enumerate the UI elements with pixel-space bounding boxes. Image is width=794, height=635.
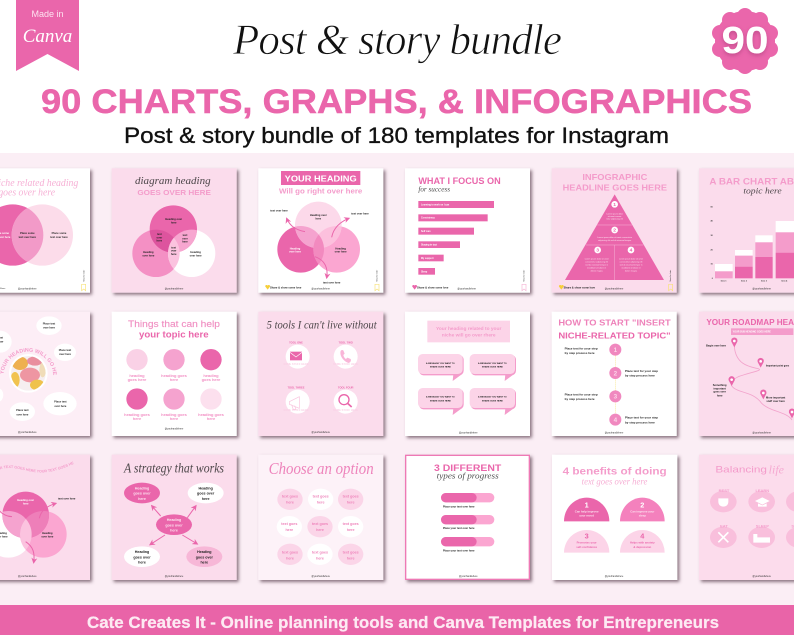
panel: speech bubbles template: A MESSAGE YOU WANT TO (426, 396, 455, 399)
panel: horizontal bars template: @yourhandlehere (457, 288, 477, 291)
panel: pyramid infographic template: dolore magna (625, 269, 638, 272)
panel: three circle diagram template: text (171, 245, 176, 249)
panel: venn with arrows template: @yourhandlehere (311, 288, 331, 291)
panel: macaron photo bubbles template: over here (43, 326, 55, 330)
panel: five tools template: SOME STUFF HERE (283, 362, 309, 366)
panel: circles grid template: heading (203, 373, 219, 378)
panel: pyramid infographic template: 3 (596, 248, 599, 254)
panel: pyramid infographic template: Lorem ipsum dolor (606, 212, 623, 215)
panel: choose an option template: text goes (343, 522, 359, 526)
panel: two circle venn template (0, 168, 90, 293)
panel: choose an option template: text goes (313, 494, 329, 498)
panel: how to start steps template: @yourhandlehere (605, 431, 624, 434)
panel: venn with arrows template: Heading (335, 246, 346, 250)
panel: strategy map template: Heading (135, 486, 149, 490)
panel: choose an option template (258, 455, 383, 580)
footer bar: Cate Creates It - Online planning tools and Canva Templates for Entrepreneurs (87, 613, 719, 632)
panel: stacked bar chart template: Item 3 (761, 280, 768, 283)
panel: horizontal bars template: Consistency (421, 217, 436, 220)
panel: speech bubbles template: SHARE GOES HERE (430, 366, 451, 369)
panel: choose an option template: here (347, 528, 355, 532)
panel: three circle diagram template: text (157, 232, 162, 236)
panel: pyramid infographic template: consectetur adipiscing elit (585, 260, 608, 263)
panel: stacked bar chart template: 0 (712, 278, 714, 280)
panel: strategy map template: Heading (198, 486, 213, 490)
panel: speech bubbles template: SHARE GOES HERE (482, 399, 503, 402)
panel: two circle venn template: Save for later (82, 270, 85, 282)
panel: stacked bar chart template: topic here (743, 186, 782, 195)
panel: macaron photo bubbles template (0, 312, 94, 440)
panel: speech bubbles template (405, 312, 530, 436)
panel: circles grid template: heading (129, 373, 145, 378)
panel: stacked bar chart template: 20 (711, 249, 714, 251)
panel: horizontal bars template: Self care (421, 231, 431, 233)
panel: roadmap template: More important (766, 395, 785, 399)
badge: 90 (712, 8, 778, 74)
panel: circles grid template (112, 312, 237, 436)
panel: choose an option template: here (316, 528, 324, 532)
panel: pyramid infographic template (552, 168, 677, 293)
panel: stacked bar chart template: Item 2 (741, 280, 748, 283)
panel: strategy map template: goes over (197, 492, 215, 496)
panel: five tools template: TOOL ONE (289, 341, 303, 345)
panel: strategy map template: here (138, 497, 146, 501)
panel: roadmap template: stuff over here (766, 399, 785, 403)
panel: two circle venn template: Share (0, 287, 6, 290)
panel: strategy map template (112, 455, 237, 580)
panel: two circle venn template: Place some (20, 231, 35, 235)
panel: pyramid infographic template: INFOGRAPHIC (582, 172, 648, 182)
panel: stacked bar chart template: 30 (711, 235, 714, 237)
panel: macaron photo bubbles template: Place text (54, 400, 67, 404)
panel: macaron photo bubbles template: over here (54, 404, 67, 408)
panel: four benefits template: 3 (585, 532, 589, 541)
panel: strategy map template: A strategy that works (123, 461, 224, 476)
main title: 90 CHARTS, GRAPHS, & INFOGRAPHICS (41, 83, 752, 121)
badge: Made in Canva ribbon: Made in (31, 9, 64, 19)
panel: circles grid template: here (133, 416, 142, 421)
panel: macaron photo bubbles template: @yourhandlehere (18, 431, 37, 434)
panel: horizontal bars template: for success (418, 184, 450, 193)
panel: venn with arrows template: Share & show some love (270, 285, 302, 289)
panel: stacked bar chart template: 40 (711, 220, 714, 223)
panel: strategy map template: goes over (196, 555, 214, 559)
panel: five tools template: 5 tools I can't live without (267, 317, 377, 331)
panel: how to start steps template: 2 (614, 370, 618, 377)
panel: horizontal bars template: Share & show some love (417, 285, 449, 289)
panel: wavy text venn template: over here (41, 535, 54, 539)
page background (0, 153, 794, 605)
panel: four benefits template (552, 455, 677, 580)
panel: roadmap template: YOUR ROADMAP HEA (706, 318, 794, 327)
panel: roadmap template: Important point goes (766, 365, 790, 368)
panel: speech bubbles template: A MESSAGE YOU WANT TO (426, 362, 455, 365)
panel: progress bars template: @yourhandlehere (459, 575, 478, 578)
panel: pyramid infographic template: HEADLINE GOES HERE (563, 182, 667, 192)
panel: roadmap template: Begin over here (706, 344, 727, 348)
panel: pyramid infographic template: @yourhandlehere (605, 288, 624, 291)
panel: choose an option template: here (286, 556, 294, 560)
panel: circles grid template: @yourhandlehere (165, 428, 184, 431)
panel: roadmap template: important (714, 386, 726, 390)
panel: how to start steps template: by step process here (625, 420, 655, 424)
panel: how to start steps template: HOW TO START "INSERT (558, 318, 671, 328)
panel: circles grid template: here (207, 416, 216, 421)
panel: choose an option template: text goes (281, 522, 297, 526)
panel: roadmap template: here (717, 394, 723, 398)
panel: four benefits template: & depression (633, 545, 652, 549)
panel: pyramid infographic template: 1 (613, 202, 616, 208)
panel: pyramid infographic template: Save for later (669, 270, 672, 282)
panel: speech bubbles template: SHARE GOES HERE (430, 399, 451, 402)
panel: wavy text venn template: here (23, 502, 29, 506)
panel: horizontal bars template: Staying in tact (421, 244, 437, 247)
panel: roadmap template: goes over (713, 390, 726, 394)
panel: pyramid infographic template: tetur adipiscing elit (606, 218, 623, 221)
panel: circles grid template: Things that can help (128, 319, 220, 329)
panel: three circle diagram template: over (157, 235, 162, 239)
panel: wavy text venn template: Heading (42, 531, 53, 535)
panel: balancing life template: S (791, 523, 794, 528)
panel: macaron photo bubbles template: over here (59, 352, 71, 356)
panel: speech bubbles template: @yourhandlehere (459, 431, 478, 434)
panel: how to start steps template: 3 (614, 394, 618, 401)
panel: roadmap template (699, 312, 794, 436)
panel: venn with arrows template: Save for later (376, 270, 379, 282)
subtitle: Post & story bundle of 180 templates for Instagram (124, 123, 669, 148)
panel: two circle venn template: text over here (50, 235, 68, 239)
template grid (0, 168, 794, 584)
panel: three circle diagram template: Heading over (165, 217, 182, 221)
badge: Made in Canva ribbon: Canva (23, 26, 72, 47)
panel: pyramid infographic template: incididunt ut labore et (587, 266, 607, 269)
panel: choose an option template: here (347, 556, 355, 560)
panel: five tools template: SOME STUFF HERE (333, 362, 359, 366)
panel: horizontal bars template (405, 168, 530, 293)
panel: strategy map template: @yourhandlehere (165, 575, 184, 578)
panel: speech bubbles template: SHARE GOES HERE (482, 366, 503, 369)
panel: two circle venn template: goes over here (0, 187, 56, 198)
panel: wavy text venn template: Heading over (17, 498, 34, 502)
panel: venn with arrows template: Will go right over here (279, 189, 362, 196)
panel: choose an option template: here (286, 500, 294, 504)
panel: how to start steps template: Place text for your step (565, 392, 598, 396)
panel: three circle diagram template: here (171, 220, 177, 224)
panel: strategy map template: Heading (197, 550, 212, 554)
panel: horizontal bars template: WHAT I FOCUS ON (418, 176, 501, 186)
panel: four benefits template: Helps with anxiety (630, 541, 655, 545)
panel: pyramid infographic template: Lorem ipsum dolor sit amet (585, 257, 609, 260)
panel: balancing life template: EAT (720, 523, 728, 528)
panel: five tools template (258, 312, 383, 436)
panel: pyramid infographic template: sit amet consec (608, 215, 622, 218)
panel: stacked bar chart template: 50 (711, 206, 714, 208)
panel: five tools template: TOOL TWO (339, 341, 353, 345)
panel: how to start steps template (552, 312, 677, 436)
panel: pyramid infographic template: consectetur adipiscing elit (620, 260, 643, 263)
panel: roadmap template: @yourhandlehere (752, 431, 772, 434)
panel: four benefits template: Can help improve (575, 509, 599, 513)
panel: two circle venn template: @yourhandlehere (18, 288, 37, 291)
panel: wavy text venn template: text over here (58, 497, 76, 501)
panel: how to start steps template: Place text for your step (625, 416, 658, 420)
panel: circles grid template: goes here (202, 377, 221, 382)
panel: stacked bar chart template: Item 1 (721, 280, 727, 283)
panel: choose an option template: text goes (282, 550, 298, 554)
script heading: Post & story bundle (232, 17, 562, 64)
panel: pyramid infographic template: incididunt ut labore et (622, 266, 641, 269)
panel: pyramid infographic template: 2 (613, 228, 616, 234)
panel: four benefits template: @yourhandlehere (605, 575, 624, 578)
panel: circles grid template: here (170, 416, 179, 421)
panel: four benefits template: Can improve your (630, 509, 655, 513)
panel: balancing life template: @yourhandlehere (752, 575, 772, 578)
panel: macaron photo bubbles template: Place text (43, 322, 55, 326)
panel: macaron photo bubbles template: Place text (59, 348, 71, 352)
panel: roadmap template: Something (713, 383, 727, 387)
panel: balancing life template: life (769, 462, 785, 476)
panel: how to start steps template: 1 (614, 347, 618, 354)
panel: pyramid infographic template: Share & show some love (564, 285, 596, 289)
panel: how to start steps template: by step process here (565, 351, 595, 355)
panel: horizontal bars template: Learning to work on I can (421, 203, 450, 206)
panel: circles grid template: goes here (128, 377, 147, 382)
panel: strategy map template: goes over (133, 555, 151, 559)
panel: circles grid template: heading goes (161, 373, 188, 378)
panel: macaron photo bubbles template: Place text (16, 408, 29, 412)
panel: horizontal bars template: My support (421, 257, 434, 260)
badge: Made in Canva ribbon (16, 0, 79, 71)
panel: how to start steps template: by step process here (625, 374, 655, 378)
panel: strategy map template: here (202, 497, 210, 501)
panel: stacked bar chart template (699, 168, 794, 293)
panel: horizontal bars template: Save for later (522, 270, 525, 282)
panel: progress bars template: Place your text over here (443, 526, 475, 530)
panel: pyramid infographic template: adipiscing elit sed do eiusmod tempor (598, 239, 632, 242)
panel: how to start steps template: NICHE-RELATED TOPIC" (558, 330, 671, 340)
panel: strategy map template: here (138, 561, 146, 565)
panel: stacked bar chart template: A BAR CHART AB (709, 176, 794, 186)
panel: choose an option template: text goes (312, 522, 328, 526)
panel: balancing life template: REST (719, 488, 730, 493)
panel: macaron photo bubbles template: over here (16, 412, 29, 416)
panel: three circle diagram template: Heading (190, 250, 201, 254)
panel: three circle diagram template: here (171, 252, 177, 256)
panel: five tools template: SOME STUFF HERE (283, 408, 309, 412)
panel: choose an option template: here (316, 556, 324, 560)
panel: progress bars template: Place your text over here (443, 504, 475, 508)
panel: three circle diagram template: over here (190, 253, 202, 257)
panel: speech bubbles template: niche will go over rhere (442, 333, 496, 339)
panel: five tools template: TOOL THREE (287, 385, 305, 389)
panel: progress bars template: Place your text over here (443, 548, 475, 552)
panel: venn with arrows template: text over here (351, 211, 369, 215)
panel: three circle diagram template: here (157, 239, 163, 243)
panel: venn with arrows template: Heading over (310, 213, 327, 217)
panel: choose an option template: here (285, 528, 293, 532)
panel: strategy map template: Heading (167, 518, 181, 522)
panel: how to start steps template: by step process here (565, 397, 595, 401)
panel: pyramid infographic template: sed do eiusmod tempor in (585, 263, 608, 266)
panel: venn with arrows template: over here (335, 250, 347, 254)
panel: circles grid template: here (170, 377, 179, 382)
panel: balancing life template (699, 455, 794, 580)
badge: 90: 90 (722, 20, 768, 62)
panel: roadmap template: YOUR SUB HEADING GOES HERE (733, 331, 771, 334)
panel: three circle diagram template: diagram heading (135, 176, 211, 187)
panel: circles grid template: heading goes (161, 412, 188, 417)
panel: four benefits template: 2 (640, 500, 644, 509)
panel: progress bars template: 3 DIFFERENT (434, 463, 502, 473)
panel: circles grid template: heading goes (124, 412, 151, 417)
panel: choose an option template: text goes (312, 550, 328, 554)
panel: four benefits template: Promotes your (577, 541, 598, 545)
panel: three circle diagram template: text (183, 233, 187, 237)
panel: speech bubbles template: A MESSAGE YOU WANT TO (478, 362, 507, 365)
panel: four benefits template: sleep (639, 514, 646, 518)
panel: five tools template: TOOL FOUR (338, 385, 354, 389)
panel: choose an option template: here (317, 500, 325, 504)
panel: venn with arrows template: over here (289, 250, 301, 254)
panel: wavy text venn template: @yourhandlehere (18, 575, 37, 578)
panel: wavy text venn template (0, 454, 94, 584)
panel: two circle venn template: text over here (19, 235, 37, 239)
panel: venn with arrows template: text over here (270, 209, 288, 213)
panel: strategy map template: goes over (165, 523, 183, 527)
panel: strategy map template: here (200, 561, 208, 565)
panel: venn with arrows template (258, 168, 383, 293)
panel: choose an option template: @yourhandlehere (311, 575, 331, 578)
panel: three circle diagram template: @yourhandlehere (165, 288, 184, 291)
panel: balancing life template: Balancing (715, 465, 767, 475)
panel: choose an option template: text goes (343, 494, 359, 498)
panel: progress bars template (406, 455, 529, 579)
panel: speech bubbles template: A MESSAGE YOU WANT TO (478, 396, 507, 399)
panel: how to start steps template: 4 (614, 417, 618, 424)
panel: venn with arrows template: text over here (323, 280, 341, 284)
panel: stacked bar chart template: 10 (711, 264, 714, 266)
panel: three circle diagram template: GOES OVER HERE (137, 188, 211, 197)
panel: stacked bar chart template: Item 4 (781, 280, 788, 283)
panel: choose an option template: text goes (343, 550, 359, 554)
footer bar (0, 605, 794, 635)
panel: three circle diagram template: over (182, 236, 188, 240)
panel: how to start steps template: Place text for your step (625, 369, 658, 373)
panel: venn with arrows template: here (316, 216, 322, 220)
panel: four benefits template: 1 (585, 500, 589, 509)
panel: choose an option template: here (347, 500, 355, 504)
panel: speech bubbles template: Your heading related to your (436, 326, 501, 332)
panel: four benefits template: self-confidence (576, 545, 597, 549)
panel: pyramid infographic template: 4 (630, 248, 633, 254)
panel: choose an option template: Choose an option (269, 459, 374, 478)
panel: venn with arrows template: Heading (290, 246, 301, 250)
panel: five tools template: @yourhandlehere (311, 431, 331, 434)
panel: three circle diagram template: over here (142, 253, 155, 257)
panel: circles grid template: heading goes (198, 412, 225, 417)
panel: four benefits template: 4 (640, 532, 645, 541)
panel: four benefits template: 4 benefits of doing (563, 466, 667, 477)
panel: three circle diagram template (112, 168, 237, 293)
panel: venn with arrows template: YOUR HEADING (285, 175, 357, 184)
panel: balancing life template: LEARN (755, 488, 769, 493)
panel: horizontal bars template: Sleep (421, 271, 428, 273)
panel: strategy map template: goes over (133, 492, 151, 496)
panel: circles grid template: your topic here (139, 329, 209, 339)
panel: four benefits template: text goes over here (582, 477, 647, 487)
panel: pyramid infographic template: Lorem ipsum dolor sit amet consectetur (597, 236, 632, 239)
panel: strategy map template: here (170, 529, 178, 533)
panel: progress bars template: types of progress (437, 472, 499, 481)
panel: how to start steps template: Place text for your step (565, 346, 598, 350)
panel: pyramid infographic template: Lorem ipsum dolor sit amet (619, 257, 643, 260)
panel: three circle diagram template: Heading (143, 250, 154, 254)
panel: choose an option template: text goes (282, 494, 298, 498)
panel: three circle diagram template: here (182, 240, 188, 244)
panel: four benefits template: your mood (579, 514, 594, 518)
panel: balancing life template: SLEEP (756, 523, 769, 528)
panel: five tools template: SOME STUFF HERE (333, 408, 359, 412)
panel: three circle diagram template: over (171, 249, 176, 253)
panel: pyramid infographic template: sed do eiusmod tempor in (620, 263, 642, 266)
panel: strategy map template: Heading (135, 550, 149, 554)
panel: two circle venn template: Place some (52, 231, 67, 235)
panel: pyramid infographic template: dolore magna (591, 269, 604, 272)
panel: stacked bar chart template: @yourhandlehere (752, 288, 772, 291)
